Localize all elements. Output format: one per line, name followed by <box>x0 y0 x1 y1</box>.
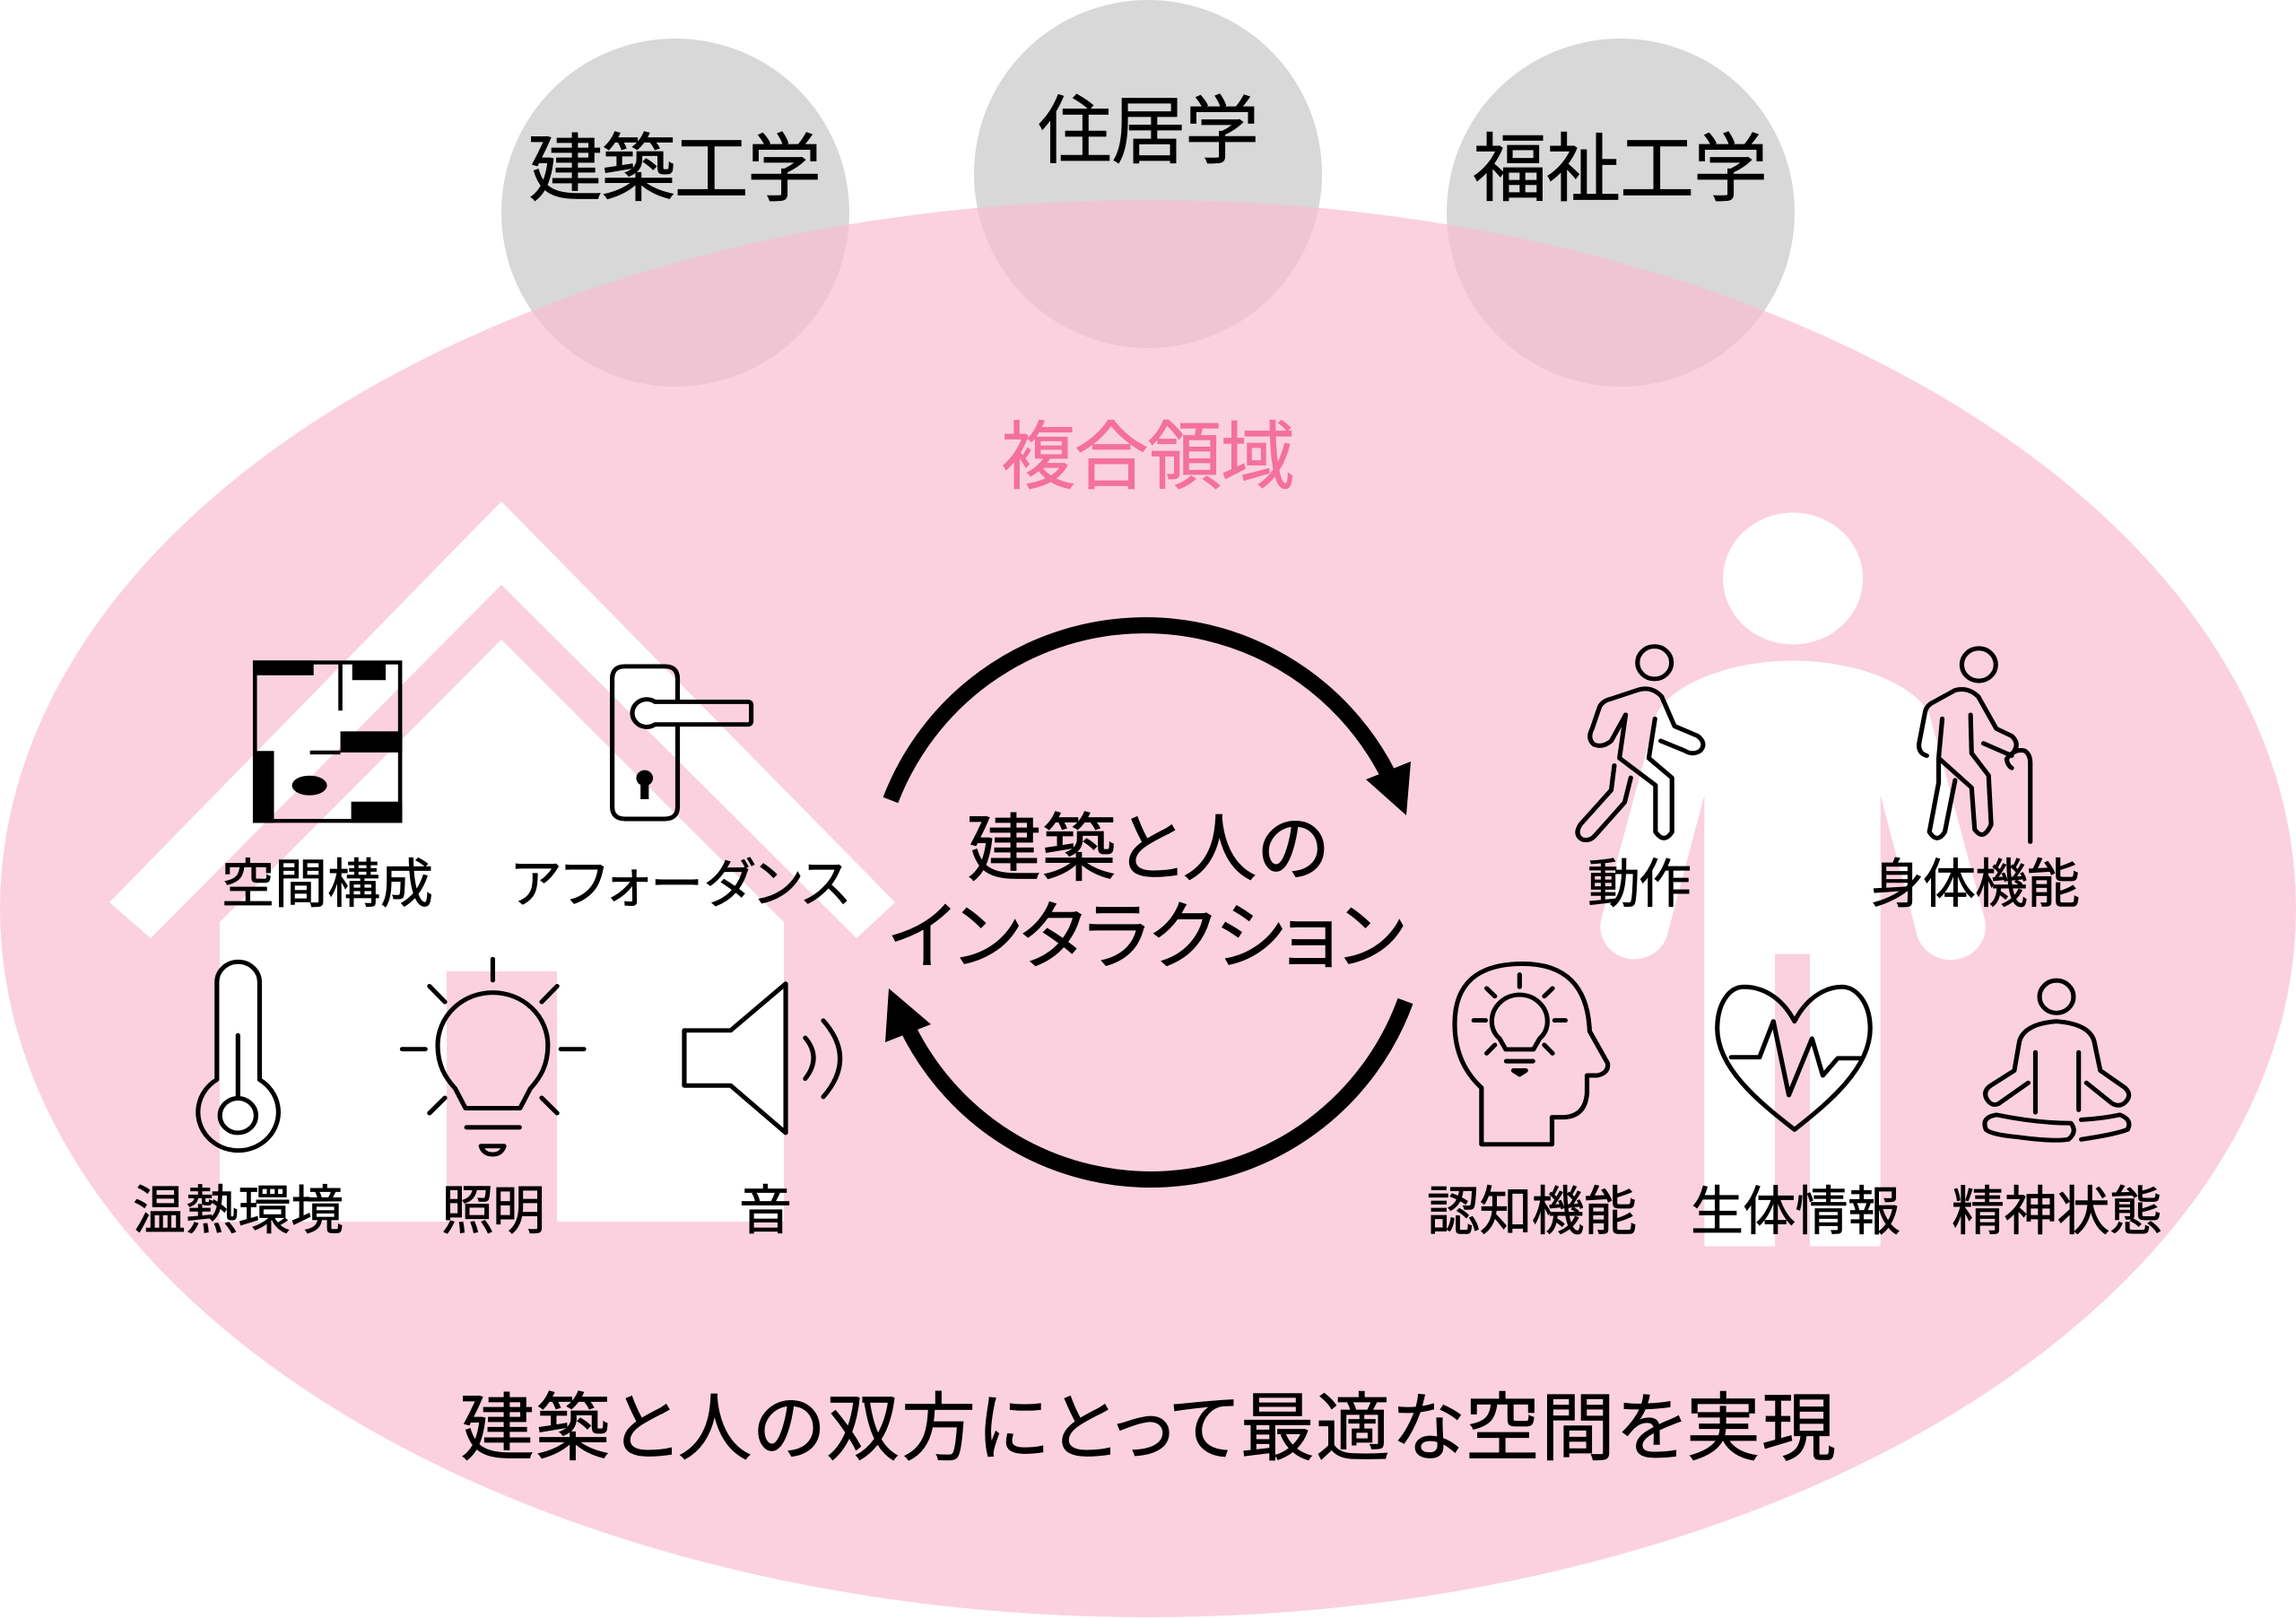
label: 生体情報: 生体情報 <box>1691 1182 1900 1241</box>
icon: heart with pulse <box>1718 987 1870 1129</box>
label: 照明: 照明 <box>441 1181 545 1240</box>
icon: door handle <box>613 666 752 819</box>
heading: 複合領域: 複合領域 <box>1001 415 1295 499</box>
icon: thermometer <box>198 962 278 1151</box>
label: 動作: 動作 <box>1587 855 1692 914</box>
label: 空間構成: 空間構成 <box>222 855 433 914</box>
icon: meditating person <box>1985 980 2129 1140</box>
heading: 建築工学: 建築工学 <box>528 127 822 211</box>
icon: head with bulb <box>1455 963 1608 1145</box>
label: 精神状態: 精神状態 <box>1952 1182 2162 1241</box>
heading: 住居学: 住居学 <box>1038 90 1259 173</box>
arrow: top arc to the person <box>891 625 1411 815</box>
label: 身体機能: 身体機能 <box>1871 855 2080 914</box>
label: 音: 音 <box>739 1181 792 1240</box>
icon: white person <box>1600 513 1986 1246</box>
bottom statement: 建築と人の双方にとって最適な空間を実現 <box>460 1387 1836 1470</box>
icon: walking person <box>1578 647 1703 840</box>
icon: speaker <box>684 984 840 1133</box>
center text: interaction: 建築と人の <box>967 807 1329 891</box>
label: 温熱環境: 温熱環境 <box>133 1181 344 1240</box>
icon: floor plan <box>253 660 402 823</box>
label: 認知機能: 認知機能 <box>1427 1182 1637 1241</box>
heading: 福祉工学: 福祉工学 <box>1473 127 1768 211</box>
icon: white house <box>109 501 895 1222</box>
icon: light bulb <box>402 959 584 1154</box>
center text: interaction: インタラクション <box>889 895 1405 979</box>
label: アフォーダンス: アフォーダンス <box>511 855 849 914</box>
arrow: bottom arc to the building <box>885 988 1405 1179</box>
center text: interaction <box>889 807 1405 979</box>
discipline circles <box>501 0 1795 387</box>
icon: elderly person with cane <box>1919 648 2031 841</box>
